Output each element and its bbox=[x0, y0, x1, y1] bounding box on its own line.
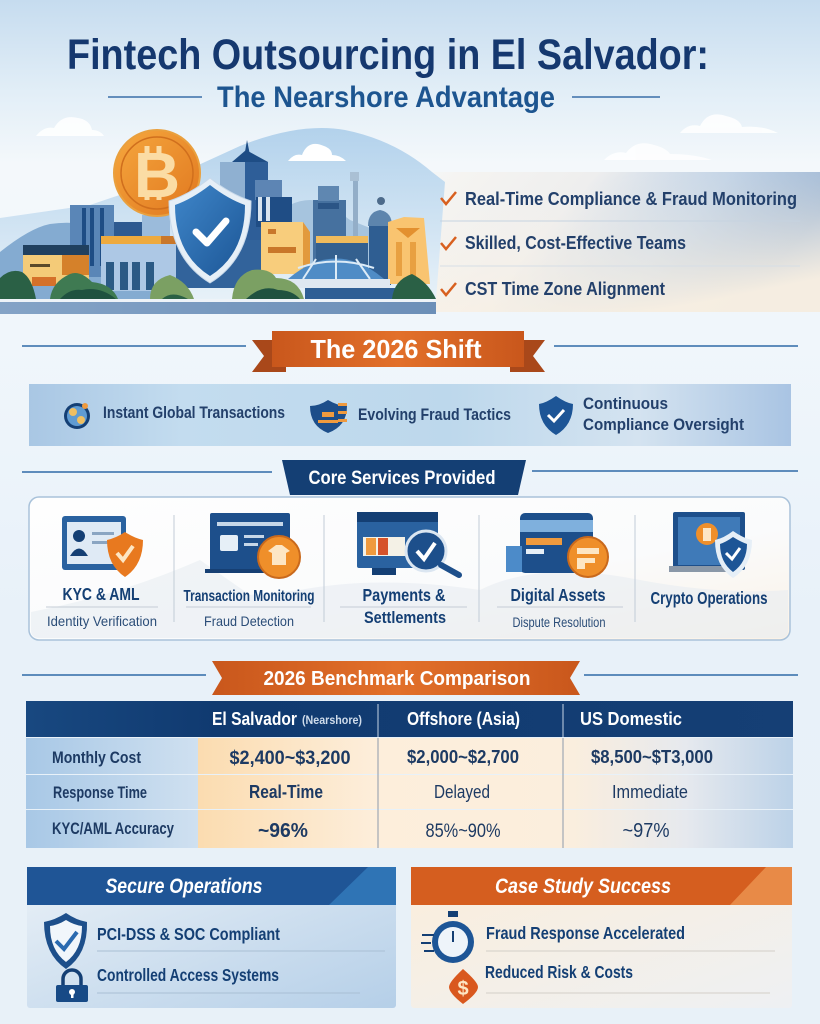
panel: 2026 shift trends: Evolving Fraud Tactics bbox=[358, 405, 511, 424]
panel: 2026 shift trends bbox=[29, 384, 791, 446]
panel: feature list backdrop bbox=[410, 172, 820, 312]
heading: core services provided bbox=[22, 460, 798, 495]
icon: stopwatch bbox=[421, 911, 474, 963]
service: digital assets: Dispute Resolution bbox=[512, 615, 606, 630]
service: payments & settlements bbox=[340, 512, 467, 627]
back towers bbox=[70, 205, 114, 277]
service: KYC & AML: KYC & AML bbox=[62, 584, 140, 604]
icon: laptop with alert bbox=[205, 513, 300, 578]
service: digital assets: Digital Assets bbox=[510, 585, 606, 605]
table row: monthly cost: $2,000~$2,700 bbox=[407, 747, 519, 767]
heading ribbon: the 2026 shift: The 2026 Shift bbox=[310, 334, 482, 364]
icon: fraud shield bbox=[310, 400, 347, 433]
heading ribbon: the 2026 shift bbox=[22, 331, 798, 372]
service: digital assets bbox=[497, 513, 623, 630]
table row: monthly cost: Monthly Cost bbox=[52, 748, 141, 767]
table row: monthly cost bbox=[26, 738, 793, 774]
hero illustration: city skyline with coin and shield bbox=[0, 128, 445, 314]
icon: dollar badge: $ bbox=[457, 978, 469, 1000]
heading: core services provided: Core Services Provided bbox=[308, 468, 496, 489]
hero illustration: city skyline with coin and shield: B bbox=[134, 139, 180, 211]
service: payments & settlements: Payments & bbox=[362, 585, 446, 605]
panel: secure operations: Controlled Access Systems bbox=[97, 965, 279, 985]
table header: US Domestic bbox=[580, 709, 682, 729]
cloud on hill bbox=[288, 144, 346, 161]
central building bbox=[101, 237, 176, 291]
header: case study bbox=[411, 867, 792, 905]
icon: id card bbox=[62, 516, 143, 577]
table header: El Salvador bbox=[212, 709, 297, 729]
bushes bbox=[0, 270, 436, 299]
header: secure operations bbox=[27, 867, 396, 905]
panel: secure operations: PCI-DSS & SOC Compliant bbox=[97, 924, 280, 944]
table row: monthly cost: $8,500~$T3,000 bbox=[591, 747, 713, 767]
panel: core services bbox=[29, 497, 790, 640]
bitcoin coin bbox=[114, 130, 200, 216]
icon: laptop with shield bbox=[669, 512, 752, 578]
benchmark table bbox=[26, 701, 793, 848]
feature: compliance bbox=[440, 188, 800, 221]
panel: 2026 shift trends: Instant Global Transactions bbox=[103, 403, 285, 422]
icon: card and coin bbox=[506, 513, 608, 577]
ground bbox=[0, 299, 436, 314]
icon: dollar badge bbox=[449, 969, 478, 1004]
panel: case study success: Fraud Response Accelerated bbox=[486, 923, 685, 943]
title: Fintech Outsourcing in El Salvador: bbox=[67, 31, 709, 79]
table row: response time: Immediate bbox=[612, 782, 688, 802]
service: KYC & AML bbox=[46, 516, 158, 629]
feature: teams bbox=[440, 232, 800, 266]
service: crypto operations bbox=[650, 512, 768, 608]
table row: KYC/AML accuracy: ~96% bbox=[258, 820, 308, 842]
text: oversight: Continuous bbox=[583, 394, 668, 413]
table row: response time: Real-Time bbox=[249, 782, 323, 802]
service: crypto operations: Crypto Operations bbox=[650, 588, 768, 608]
feature: teams: Skilled, Cost-Effective Teams bbox=[465, 232, 686, 253]
text: oversight: Compliance Oversight bbox=[583, 415, 744, 434]
table row: KYC/AML accuracy bbox=[26, 810, 793, 848]
table row: KYC/AML accuracy: ~97% bbox=[622, 820, 670, 842]
table header: (Nearshore) bbox=[302, 713, 362, 727]
left yellow building bbox=[23, 245, 89, 285]
service: transaction monitoring bbox=[184, 513, 314, 629]
table row: KYC/AML accuracy: 85%~90% bbox=[426, 821, 501, 842]
orange building bbox=[261, 222, 303, 274]
icon: padlock bbox=[56, 970, 88, 1002]
service: KYC & AML: Identity Verification bbox=[47, 613, 157, 629]
hills bbox=[0, 128, 445, 300]
icon: monitor with magnifier bbox=[357, 512, 459, 575]
panel: case study success: Reduced Risk & Costs bbox=[485, 962, 633, 982]
service: payments & settlements: Settlements bbox=[364, 609, 446, 627]
service: transaction monitoring: Fraud Detection bbox=[204, 613, 294, 629]
clouds bbox=[36, 114, 778, 160]
service: transaction monitoring: Transaction Monitoring bbox=[184, 588, 314, 605]
subtitle: The Nearshore Advantage bbox=[217, 81, 555, 114]
table row: KYC/AML accuracy: KYC/AML Accuracy bbox=[52, 819, 174, 838]
icon: global transactions bbox=[64, 403, 90, 429]
heading ribbon: benchmark comparison: 2026 Benchmark Comparison bbox=[264, 668, 530, 690]
feature list bbox=[440, 188, 800, 299]
table row: response time: Delayed bbox=[434, 782, 490, 802]
table row: monthly cost: $2,400~$3,200 bbox=[230, 748, 350, 769]
table row: response time bbox=[26, 775, 793, 809]
shield bbox=[169, 178, 251, 283]
icon: oversight shield bbox=[539, 396, 573, 435]
dome bbox=[288, 258, 384, 279]
icon: shield bbox=[44, 913, 87, 969]
header: case study: Case Study Success bbox=[495, 875, 671, 898]
heading ribbon: benchmark comparison bbox=[22, 661, 798, 695]
header: secure operations: Secure Operations bbox=[106, 875, 262, 898]
feature: time zone: CST Time Zone Alignment bbox=[465, 278, 665, 299]
text: oversight bbox=[583, 394, 744, 434]
panel: case study success bbox=[411, 867, 792, 1008]
table header bbox=[26, 701, 793, 737]
table header: Offshore (Asia) bbox=[407, 709, 520, 729]
panel: secure operations bbox=[27, 867, 396, 1008]
table row: response time: Response Time bbox=[53, 783, 147, 802]
